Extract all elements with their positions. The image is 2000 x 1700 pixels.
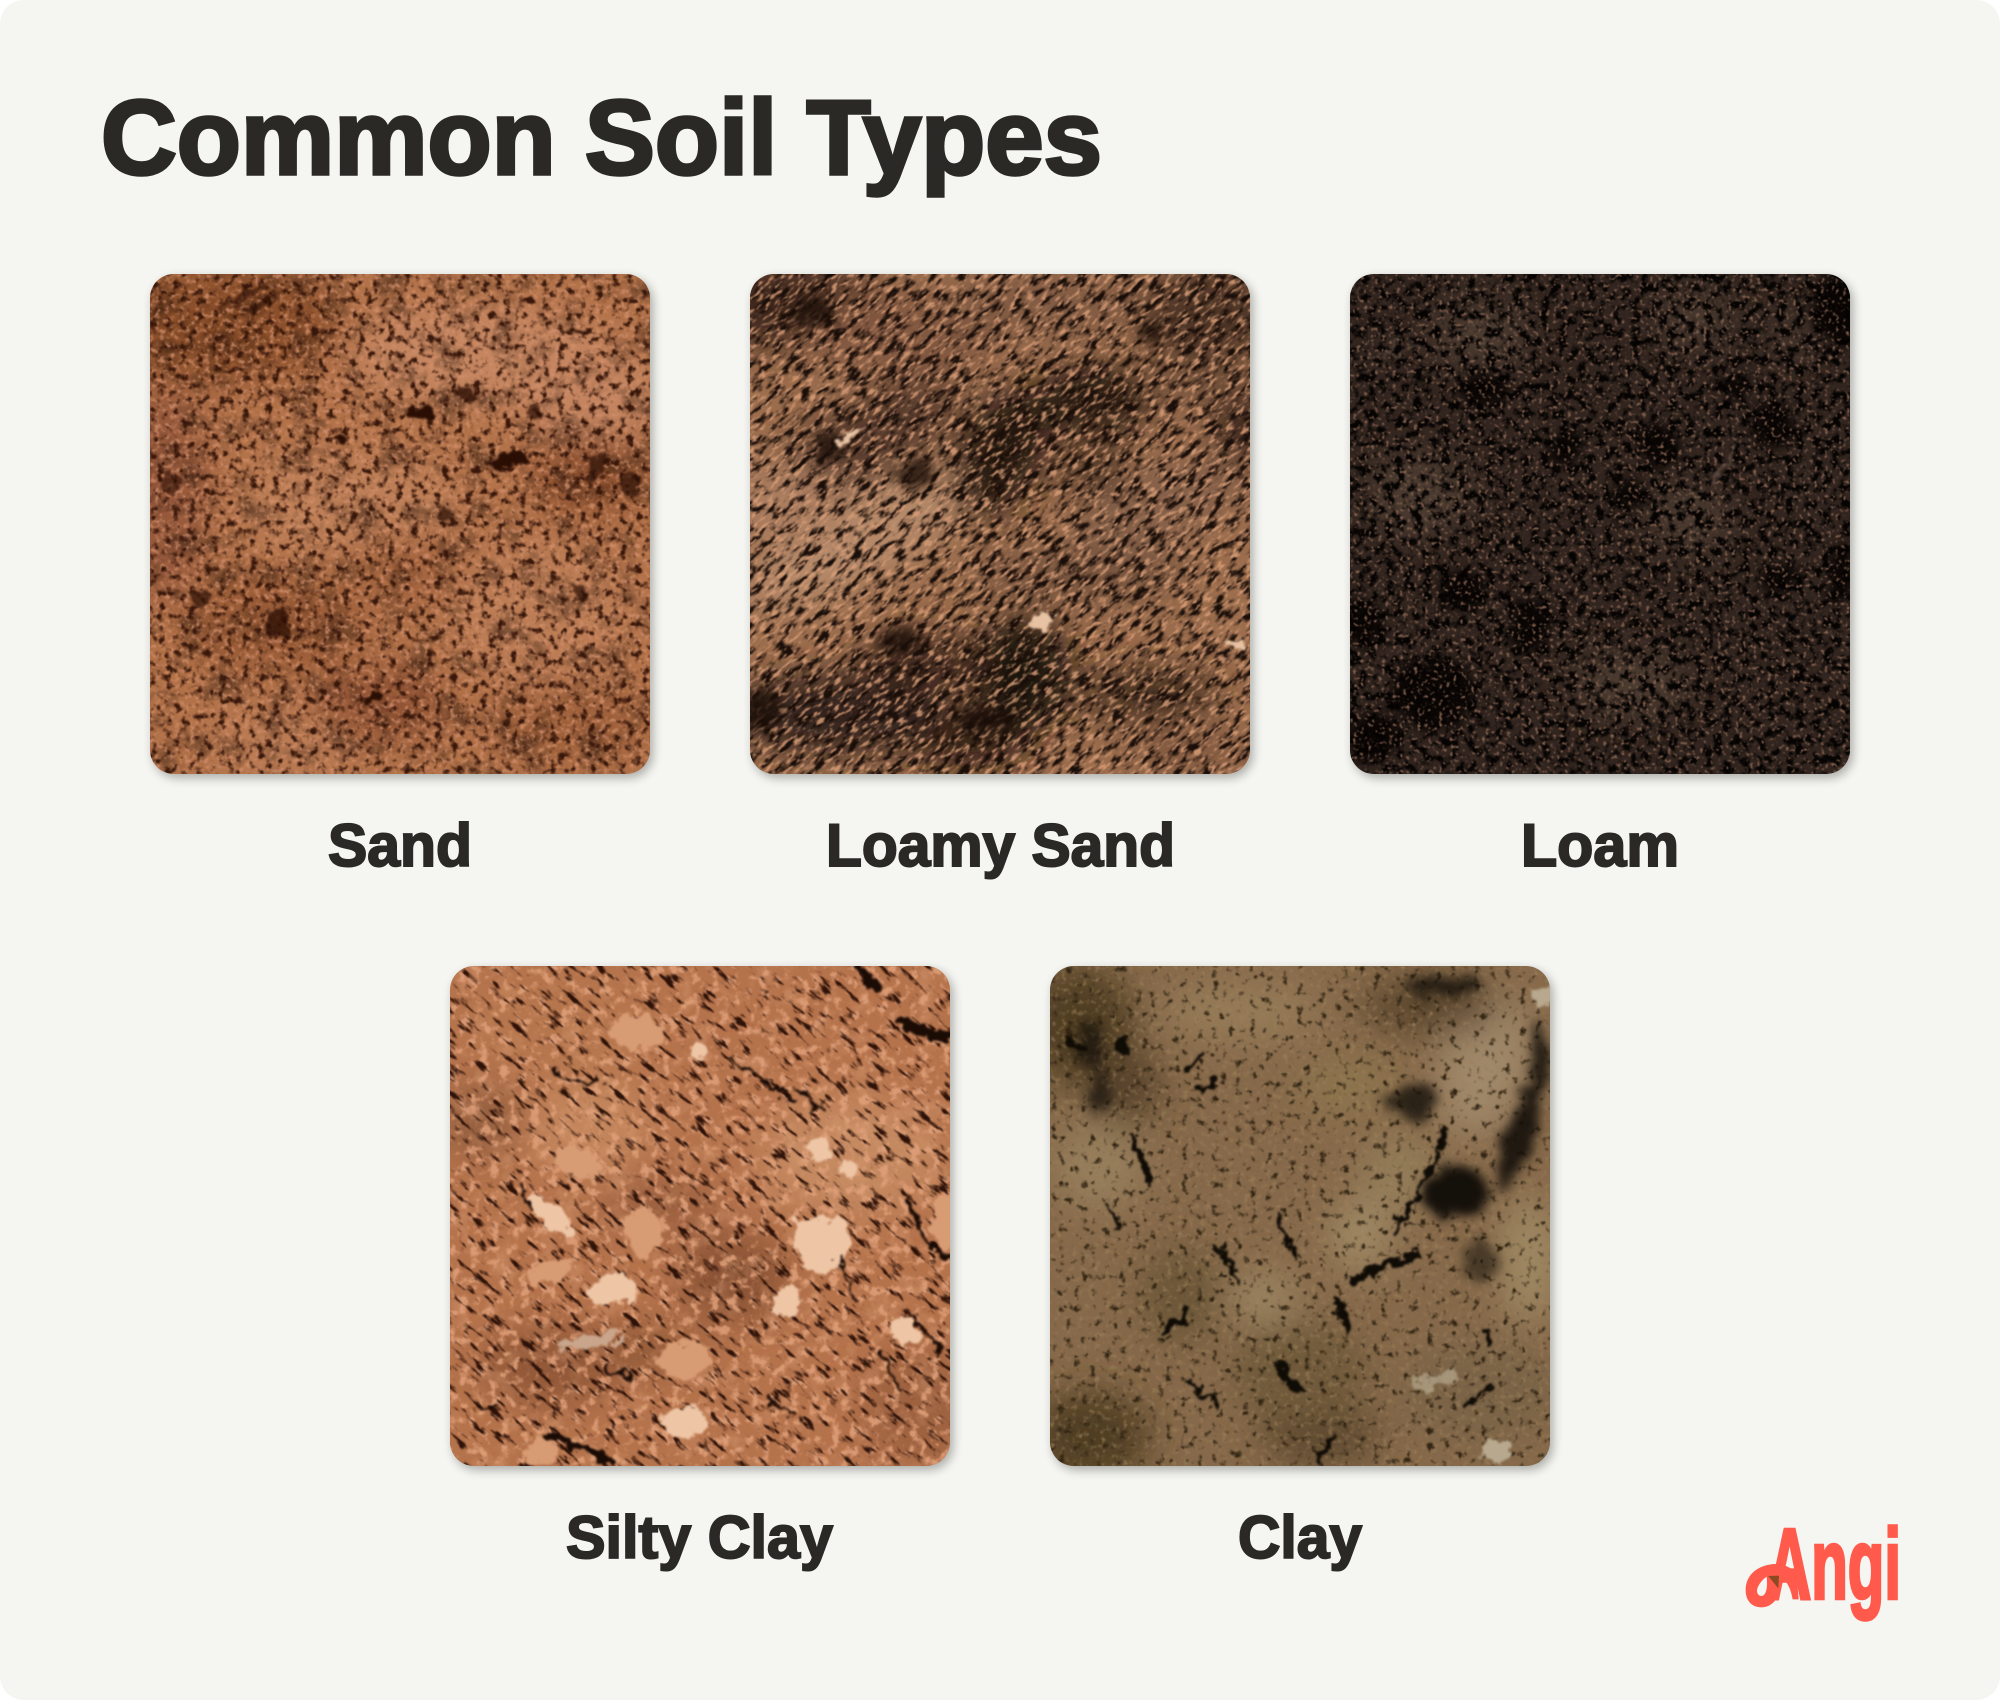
label: Loam: Loam	[1521, 812, 1679, 879]
panel: Clay	[1025, 966, 1561, 1571]
panel: Loamy Sand	[747, 272, 1259, 880]
panel: Sand	[147, 272, 659, 868]
photo: loamy sand soil	[750, 274, 1250, 774]
logo: Angi: Angi	[1768, 1508, 1901, 1620]
photo: silty clay soil	[450, 966, 950, 1466]
logo: Angi	[1746, 1508, 1901, 1620]
photo: loam soil	[1338, 274, 1870, 774]
panel: Loam	[1338, 274, 1870, 879]
label: Silty Clay: Silty Clay	[566, 1504, 834, 1571]
label: Sand: Sand	[328, 812, 472, 879]
panel: Silty Clay	[447, 964, 959, 1572]
photo: sand soil	[150, 274, 650, 774]
title: Common Soil Types	[101, 79, 1102, 197]
label: Clay: Clay	[1238, 1504, 1363, 1571]
photo: clay soil	[1025, 966, 1561, 1481]
label: Loamy Sand: Loamy Sand	[826, 812, 1175, 879]
